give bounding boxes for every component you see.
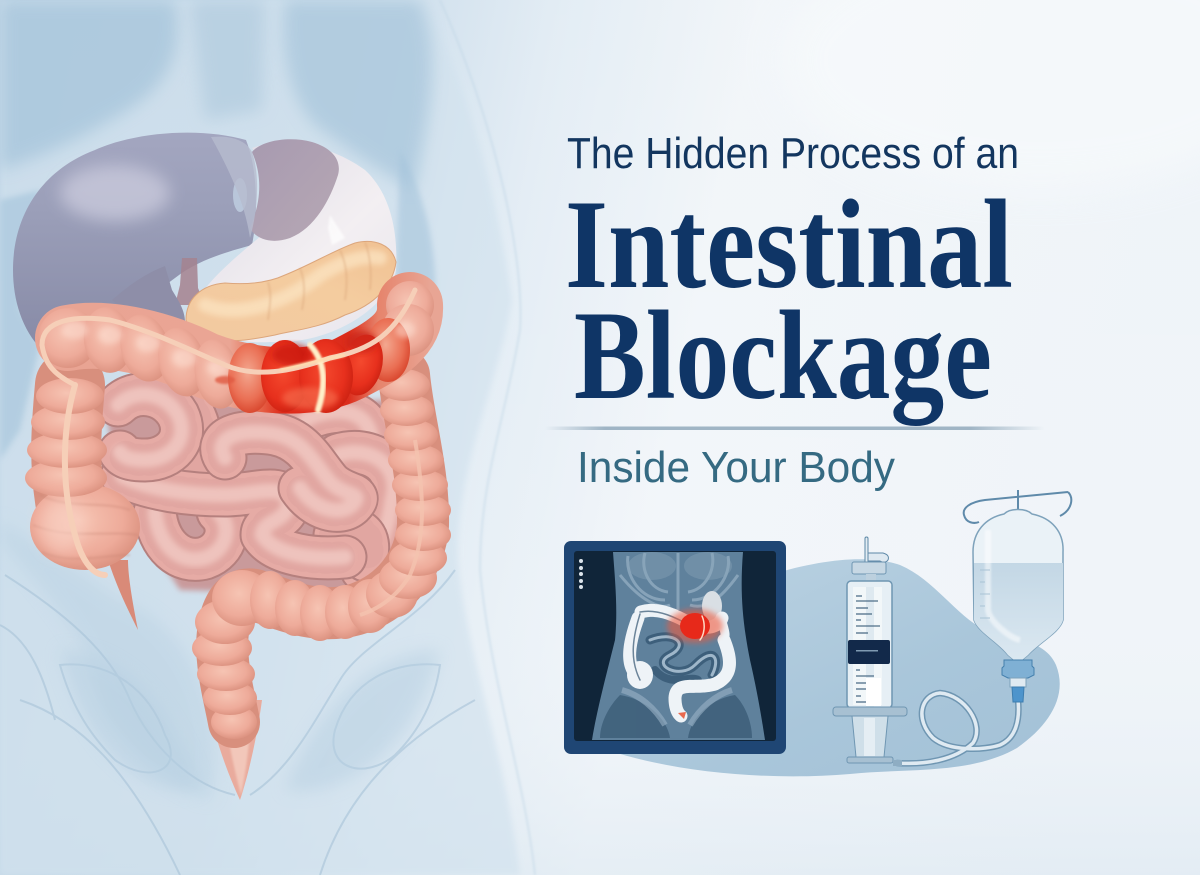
blockage flash — [310, 345, 323, 410]
blockage shading — [272, 344, 312, 366]
stomach food band — [186, 241, 396, 341]
title word: Blockage: Blockage — [574, 286, 992, 426]
gallbladder and pancreas lobe — [112, 266, 185, 323]
iv bag — [964, 490, 1071, 702]
subtitle: Inside Your Body — [577, 443, 895, 492]
x-ray torso — [592, 552, 765, 740]
title word: Intestinal: Intestinal — [565, 175, 1013, 315]
descending and sigmoid colon — [192, 369, 451, 739]
highlights — [62, 321, 415, 376]
appendix — [108, 560, 138, 630]
gastric fundus overlay — [250, 139, 339, 241]
drip connector — [1002, 660, 1034, 678]
backdrop blob — [617, 559, 1060, 776]
ascending colon and cecum — [25, 378, 140, 630]
right torso edge light — [440, 0, 535, 875]
syringe — [833, 537, 907, 763]
x-ray colon — [627, 609, 729, 719]
portal vessel — [175, 258, 205, 305]
graduation marks — [856, 596, 880, 702]
base plate — [847, 757, 893, 763]
colon band — [68, 305, 410, 381]
lobes — [386, 281, 434, 329]
fluid — [974, 563, 1063, 660]
x-ray ribs — [620, 553, 738, 610]
bag body — [973, 510, 1063, 660]
rectum — [208, 700, 262, 800]
x-ray marker dots — [579, 559, 583, 589]
loops — [155, 512, 226, 559]
right rib shadow — [395, 150, 435, 345]
small intestine — [105, 395, 405, 595]
torso outline — [0, 0, 520, 875]
lungs — [0, 0, 432, 190]
x-ray stomach — [702, 591, 722, 621]
x-ray small intestine — [650, 637, 716, 680]
teniae strip — [42, 290, 415, 372]
stomach — [186, 137, 396, 342]
plunger rod — [865, 537, 868, 565]
title line one: The Hidden Process of an — [567, 129, 1019, 178]
x-ray blockage — [667, 609, 723, 643]
plunger seal band — [848, 640, 890, 664]
barrel — [847, 581, 892, 708]
liver — [13, 133, 256, 350]
hanger — [964, 490, 1071, 523]
left flank shadow — [0, 190, 40, 460]
title block — [565, 129, 1019, 492]
x-ray pelvis — [600, 695, 752, 738]
lower chamber — [852, 716, 888, 757]
iv tubing — [893, 693, 1018, 766]
transverse colon with blockage — [38, 281, 434, 413]
flange — [833, 707, 907, 716]
back fill — [105, 400, 405, 595]
plunger cap — [852, 562, 886, 574]
pelvis — [0, 570, 475, 875]
body silhouette and faint anatomy — [0, 0, 535, 875]
x-ray panel — [564, 541, 786, 754]
